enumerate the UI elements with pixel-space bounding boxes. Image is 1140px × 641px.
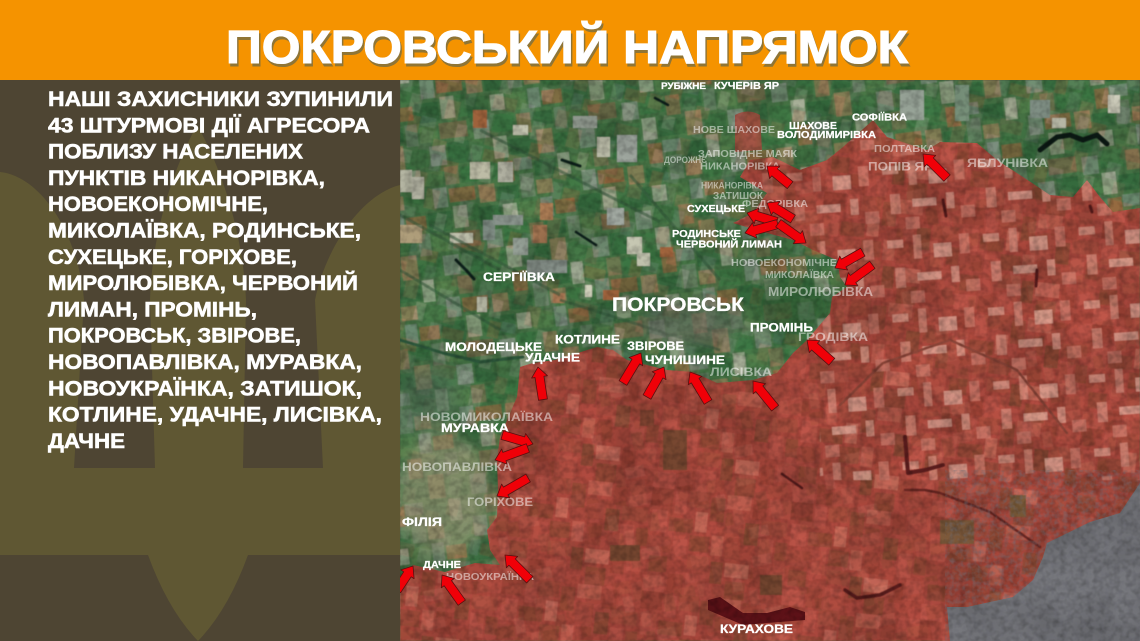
header banner — [0, 0, 1140, 80]
panel: satellite map — [390, 80, 1140, 641]
text block: defenders summary: НОВОПАВЛІВКА, МУРАВКА, — [48, 351, 362, 374]
map: isolated red area — [735, 112, 762, 152]
text block: defenders summary — [48, 88, 393, 453]
map: farmland base — [400, 80, 1140, 641]
map: place labels: ДОРОЖНЄ — [664, 155, 708, 165]
map: place labels: МИРОЛЮБІВКА — [768, 284, 874, 299]
map: place labels: РОДИНСЬКЕ — [672, 229, 741, 240]
text block: defenders summary: МИКОЛАЇВКА, РОДИНСЬКЕ, — [48, 220, 361, 242]
map: place labels: КУРАХОВЕ — [720, 622, 793, 636]
map: place labels: ФЕДОРІВКА — [742, 198, 808, 210]
map: place labels: ЯБЛУНІВКА — [967, 156, 1048, 170]
map: place labels: ПРОМІНЬ — [750, 320, 813, 334]
text block: defenders summary: 43 ШТУРМОВІ ДІЇ АГРЕСОРА — [48, 114, 370, 137]
map: place labels: КОТЛИНЕ — [555, 332, 620, 346]
title: ПОКРОВСЬКИЙ НАПРЯМОК — [226, 21, 909, 73]
map: place labels: ГРОДІВКА — [798, 330, 868, 344]
map: city texture — [945, 470, 1140, 641]
text block: defenders summary: ПУНКТІВ НИКАНОРІВКА, — [48, 167, 325, 190]
text block: defenders summary: НАШІ ЗАХИСНИКИ ЗУПИНИЛИ — [48, 88, 393, 111]
map: place labels: ПОКРОВСЬК — [612, 295, 744, 316]
map: reservoir — [708, 597, 805, 625]
text block: defenders summary: ДАЧНЕ — [48, 430, 125, 453]
map: place labels: ЗВІРОВЕ — [627, 339, 684, 353]
map: settlement and terrain tints — [399, 277, 828, 555]
map: place labels: ЗАТИШОК — [713, 190, 764, 202]
text block: defenders summary: НОВОУКРАЇНКА, ЗАТИШОК, — [48, 377, 362, 400]
emblem: trident watermark — [0, 125, 400, 641]
map: place labels: ЛИСІВКА — [710, 365, 772, 379]
map: place labels: НОВОМИКОЛАЇВКА — [420, 409, 553, 424]
map: place labels: РУБІЖНЕ — [661, 81, 706, 92]
map: place labels: КУЧЕРІВ ЯР — [714, 81, 779, 92]
text block: defenders summary: ПОБЛИЗУ НАСЕЛЕНИХ — [48, 141, 303, 164]
map: place labels: ЗАПОВІДНЕ МАЯК — [698, 148, 798, 160]
map: place labels: ДАЧНЕ — [423, 560, 461, 571]
map: red occupied zone — [400, 80, 1140, 641]
map: place labels: НОВЕ ШАХОВЕ — [693, 124, 775, 136]
text block: defenders summary: СУХЕЦЬКЕ, ГОРІХОВЕ, — [48, 246, 297, 269]
map: place labels: МОЛОДЕЦЬКЕ — [445, 340, 542, 354]
map: texture overlay — [400, 80, 1140, 641]
text block: defenders summary: КОТЛИНЕ, УДАЧНЕ, ЛИСІВКА, — [48, 404, 382, 427]
map: rivers and ponds — [400, 98, 1107, 598]
text block: defenders summary: ПОКРОВСЬК, ЗВІРОВЕ, — [48, 325, 301, 348]
text block: defenders summary: ЛИМАН, ПРОМІНЬ, — [48, 298, 257, 321]
map: place labels: ЧЕРВОНИЙ ЛИМАН — [676, 238, 782, 250]
map: place labels: УДАЧНЕ — [525, 350, 580, 364]
map: place labels: МУРАВКА — [441, 421, 509, 435]
map: place labels: СУХЕЦЬКЕ — [687, 204, 745, 215]
map: place labels: ВОЛОДИМИРІВКА — [777, 130, 876, 141]
map: grey city district — [945, 470, 1140, 641]
map: place labels: ГОРІХОВЕ — [467, 495, 533, 509]
map: place labels: ПОЛТАВКА — [874, 143, 935, 155]
map: place labels: НОВОУКРАЇНКА — [446, 570, 534, 583]
map: place labels: НИКАНОРІВКА — [700, 160, 780, 172]
map: place labels: ПОПІВ ЯР — [868, 160, 933, 174]
map: place labels: МИКОЛАЇВКА — [765, 268, 834, 281]
map: fine grain overlay — [400, 80, 1140, 641]
map: place labels: СОФІЇВКА — [852, 110, 907, 124]
map: place labels: НОВОПАВЛІВКА — [402, 460, 512, 474]
map: place labels: НОВОЕКОНОМІЧНЕ — [731, 257, 837, 269]
panel: left text panel — [0, 80, 400, 641]
map: place labels: НИКАНОРІВКА — [701, 180, 763, 190]
map: place labels: СЕРГІЇВКА — [483, 269, 555, 284]
map: place labels: ЧУНИШИНЕ — [645, 353, 725, 367]
map: red attack arrows — [390, 148, 953, 607]
text block: defenders summary: МИРОЛЮБІВКА, ЧЕРВОНИЙ — [48, 271, 358, 295]
text block: defenders summary: НОВОЕКОНОМІЧНЕ, — [48, 193, 268, 216]
map: place labels: ШАХОВЕ — [789, 121, 837, 132]
map: place labels — [402, 81, 1048, 636]
map: place labels: ФІЛІЯ — [402, 515, 442, 529]
